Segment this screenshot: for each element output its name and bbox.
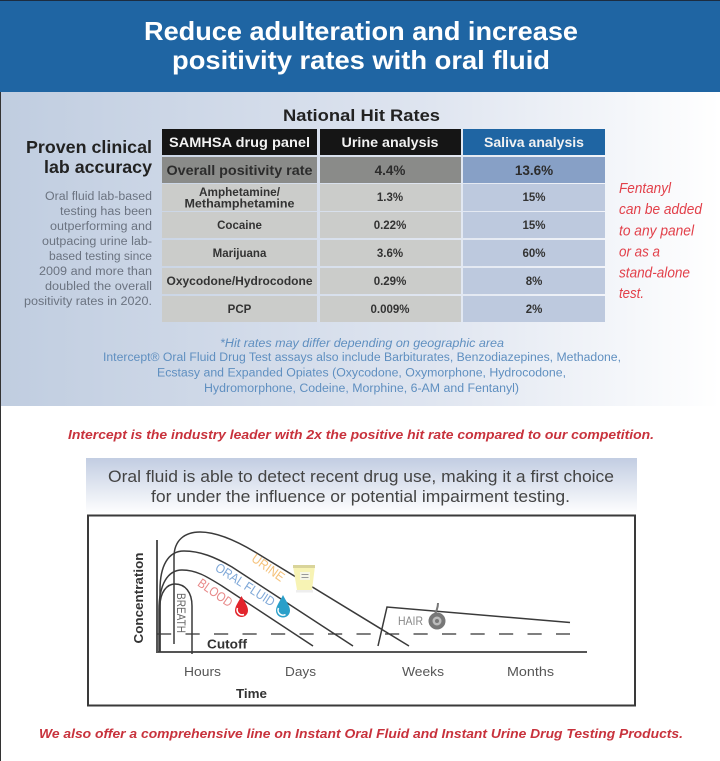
footnote: Ecstasy and Expanded Opiates (Oxycodone, Oxymorphone, Hydrocodone, bbox=[157, 368, 566, 380]
row: pcp: PCP bbox=[228, 304, 252, 316]
page edge bbox=[0, 0, 1, 761]
row: oxycodone: 8% bbox=[526, 276, 542, 288]
row: oxycodone: 0.29% bbox=[374, 276, 406, 288]
row: marijuana bbox=[162, 240, 605, 266]
footnote bbox=[103, 338, 621, 395]
icon: urine cup bbox=[293, 565, 315, 592]
row: cocaine bbox=[162, 212, 605, 238]
row: cocaine: 15% bbox=[522, 220, 546, 232]
row: oxycodone: Oxycodone/Hydrocodone bbox=[166, 276, 312, 288]
label: breath: BREATH bbox=[174, 593, 186, 633]
label: urine: URINE bbox=[249, 551, 288, 585]
row: amphetamine: Amphetamine/ bbox=[199, 187, 281, 199]
row: overall positivity rate: Overall positivity rate bbox=[166, 163, 313, 178]
text block: lab accuracy description: Oral fluid lab-based bbox=[45, 191, 152, 203]
heading: national hit rates: National Hit Rates bbox=[283, 106, 440, 125]
title: positivity rates with oral fluid bbox=[172, 45, 550, 75]
table header row bbox=[162, 129, 605, 155]
text block: lab accuracy description: positivity rates in 2020. bbox=[24, 296, 152, 308]
curve: blood bbox=[159, 570, 313, 652]
band: oral fluid statement: for under the influence or potential impairment testing. bbox=[151, 487, 570, 506]
curve: oral fluid bbox=[160, 551, 353, 652]
red statement: instant products: We also offer a comprehensive line on Instant Oral Fluid and Instant Urine Drug Testing Products. bbox=[39, 726, 683, 741]
footnote: *Hit rates may differ depending on geographic area bbox=[220, 338, 504, 350]
heading: proven clinical lab accuracy: lab accuracy bbox=[44, 157, 152, 177]
icon: blood drop bbox=[235, 596, 248, 617]
row: overall positivity rate bbox=[162, 157, 605, 183]
icon: oral fluid drop bbox=[276, 595, 290, 618]
callout: fentanyl: or as a bbox=[619, 244, 660, 260]
callout: fentanyl: to any panel bbox=[619, 222, 695, 240]
row: marijuana: 60% bbox=[522, 248, 546, 260]
row: pcp bbox=[162, 296, 605, 322]
axis ticks: Weeks bbox=[402, 664, 445, 679]
table header row: Urine analysis bbox=[342, 135, 438, 150]
title bbox=[144, 16, 578, 75]
header banner bbox=[0, 0, 720, 92]
curve: urine bbox=[174, 532, 409, 646]
axis label: concentration: Concentration bbox=[131, 552, 146, 644]
text block: lab accuracy description: testing has been bbox=[60, 206, 152, 218]
chart: detection window bbox=[88, 516, 635, 706]
table: hit rates bbox=[162, 129, 605, 322]
red statement: industry leader: Intercept is the industry leader with 2x the positive hit rate compared to our competition. bbox=[68, 427, 654, 442]
row: marijuana: Marijuana bbox=[213, 248, 267, 260]
footnote: Hydromorphone, Codeine, Morphine, 6-AM and Fentanyl) bbox=[204, 383, 519, 395]
row: cocaine: Cocaine bbox=[217, 220, 262, 232]
icon: hair follicle bbox=[430, 603, 444, 628]
row: pcp: 0.009% bbox=[370, 304, 410, 316]
callout: fentanyl: Fentanyl bbox=[619, 180, 672, 197]
heading: proven clinical lab accuracy: Proven clinical bbox=[26, 137, 152, 157]
curve: hair bbox=[378, 607, 570, 646]
row: cocaine: 0.22% bbox=[374, 220, 406, 232]
text block: lab accuracy description: based testing since bbox=[49, 251, 152, 263]
cutoff line bbox=[157, 633, 570, 635]
label: hair: HAIR bbox=[398, 614, 423, 628]
row: pcp: 2% bbox=[526, 304, 542, 316]
row: amphetamine: 15% bbox=[522, 192, 546, 204]
label: oral fluid: ORAL FLUID bbox=[213, 560, 278, 609]
row: amphetamine: Methamphetamine bbox=[184, 198, 294, 210]
row: amphetamine: 1.3% bbox=[377, 192, 403, 204]
table header row: SAMHSA drug panel bbox=[169, 135, 310, 150]
label: cutoff: Cutoff bbox=[207, 636, 248, 652]
text block: lab accuracy description: doubled the overall bbox=[45, 281, 152, 293]
title: Reduce adulteration and increase bbox=[144, 16, 578, 46]
label: blood: BLOOD bbox=[195, 575, 236, 610]
panel: national hit rates bbox=[1, 92, 720, 406]
axis ticks: Months bbox=[507, 664, 555, 679]
row: marijuana: 3.6% bbox=[377, 248, 403, 260]
callout: fentanyl: can be added bbox=[619, 201, 703, 218]
callout: fentanyl: test. bbox=[619, 285, 644, 302]
callout: fentanyl: stand-alone bbox=[619, 264, 690, 282]
text block: lab accuracy description bbox=[24, 191, 152, 308]
curve: breath bbox=[160, 584, 192, 654]
text block: lab accuracy description: outpacing urine lab- bbox=[42, 236, 152, 248]
axis ticks: Days bbox=[285, 664, 317, 679]
axis label: time: Time bbox=[236, 686, 267, 701]
heading: proven clinical lab accuracy bbox=[26, 137, 152, 177]
axis ticks bbox=[184, 664, 555, 679]
row: amphetamine bbox=[162, 184, 605, 211]
row: overall positivity rate: 4.4% bbox=[375, 163, 405, 178]
axis ticks: Hours bbox=[184, 664, 222, 679]
footnote: Intercept® Oral Fluid Drug Test assays also include Barbiturates, Benzodiazepines, Methadone, bbox=[103, 352, 621, 364]
band: oral fluid statement bbox=[86, 458, 637, 514]
table header row: Saliva analysis bbox=[484, 135, 584, 150]
axes bbox=[157, 540, 587, 652]
band: oral fluid statement: Oral fluid is able to detect recent drug use, making it a first choice bbox=[108, 467, 614, 486]
row: oxycodone bbox=[162, 268, 605, 294]
callout: fentanyl bbox=[619, 180, 703, 302]
text block: lab accuracy description: 2009 and more than bbox=[39, 266, 152, 278]
text block: lab accuracy description: outperforming and bbox=[50, 221, 152, 233]
row: overall positivity rate: 13.6% bbox=[515, 163, 553, 178]
